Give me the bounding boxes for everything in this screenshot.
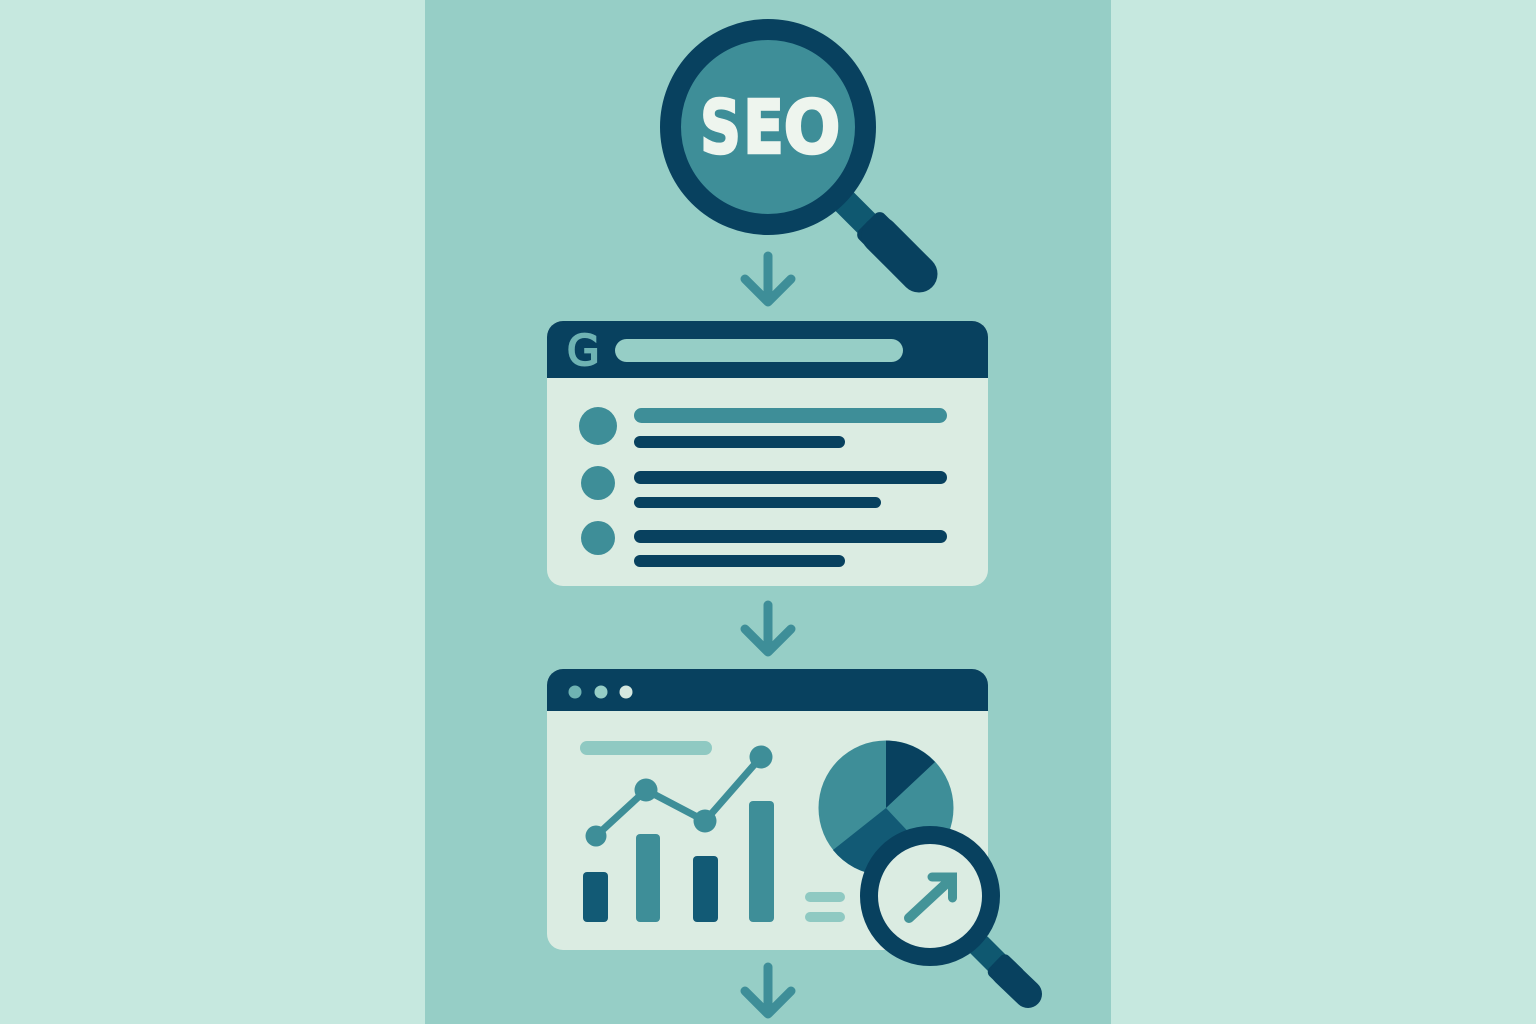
SEO label: S bbox=[700, 85, 741, 171]
bar chart bbox=[583, 801, 774, 922]
magnifier lens bbox=[670, 30, 866, 224]
magnifier lens bbox=[869, 835, 991, 957]
pie chart bbox=[818, 740, 954, 876]
result 3 bbox=[581, 521, 947, 567]
window header bar bbox=[547, 669, 988, 711]
arrow: magnifier to search results bbox=[745, 256, 791, 302]
icon: upward trend arrow bbox=[909, 877, 952, 918]
SEO label: E bbox=[743, 85, 784, 171]
window body bbox=[547, 321, 988, 586]
chart title bar bbox=[580, 741, 712, 755]
legend lines bbox=[805, 892, 845, 922]
search box bbox=[615, 339, 903, 362]
panel: search results window bbox=[547, 321, 988, 586]
window header bar bbox=[547, 321, 988, 378]
icon: G logo: G bbox=[567, 326, 600, 375]
magnifier grip bbox=[985, 952, 1028, 994]
result 1 bbox=[579, 407, 947, 448]
arrow: search results to analytics bbox=[745, 605, 791, 652]
icon: SEO magnifying glass bbox=[670, 30, 919, 274]
magnifier neck bbox=[830, 187, 872, 229]
central column panel bbox=[425, 0, 1111, 1024]
SEO label: O bbox=[784, 85, 840, 171]
magnifier grip bbox=[854, 209, 919, 274]
arrow: analytics to next step bbox=[745, 967, 791, 1014]
magnifier neck bbox=[970, 936, 1002, 968]
result 2 bbox=[581, 466, 947, 508]
window control dots bbox=[568, 686, 632, 698]
panel: analytics window bbox=[547, 669, 988, 950]
icon: growth magnifying glass bbox=[869, 835, 1028, 994]
line chart bbox=[586, 746, 772, 846]
window body bbox=[547, 669, 988, 950]
